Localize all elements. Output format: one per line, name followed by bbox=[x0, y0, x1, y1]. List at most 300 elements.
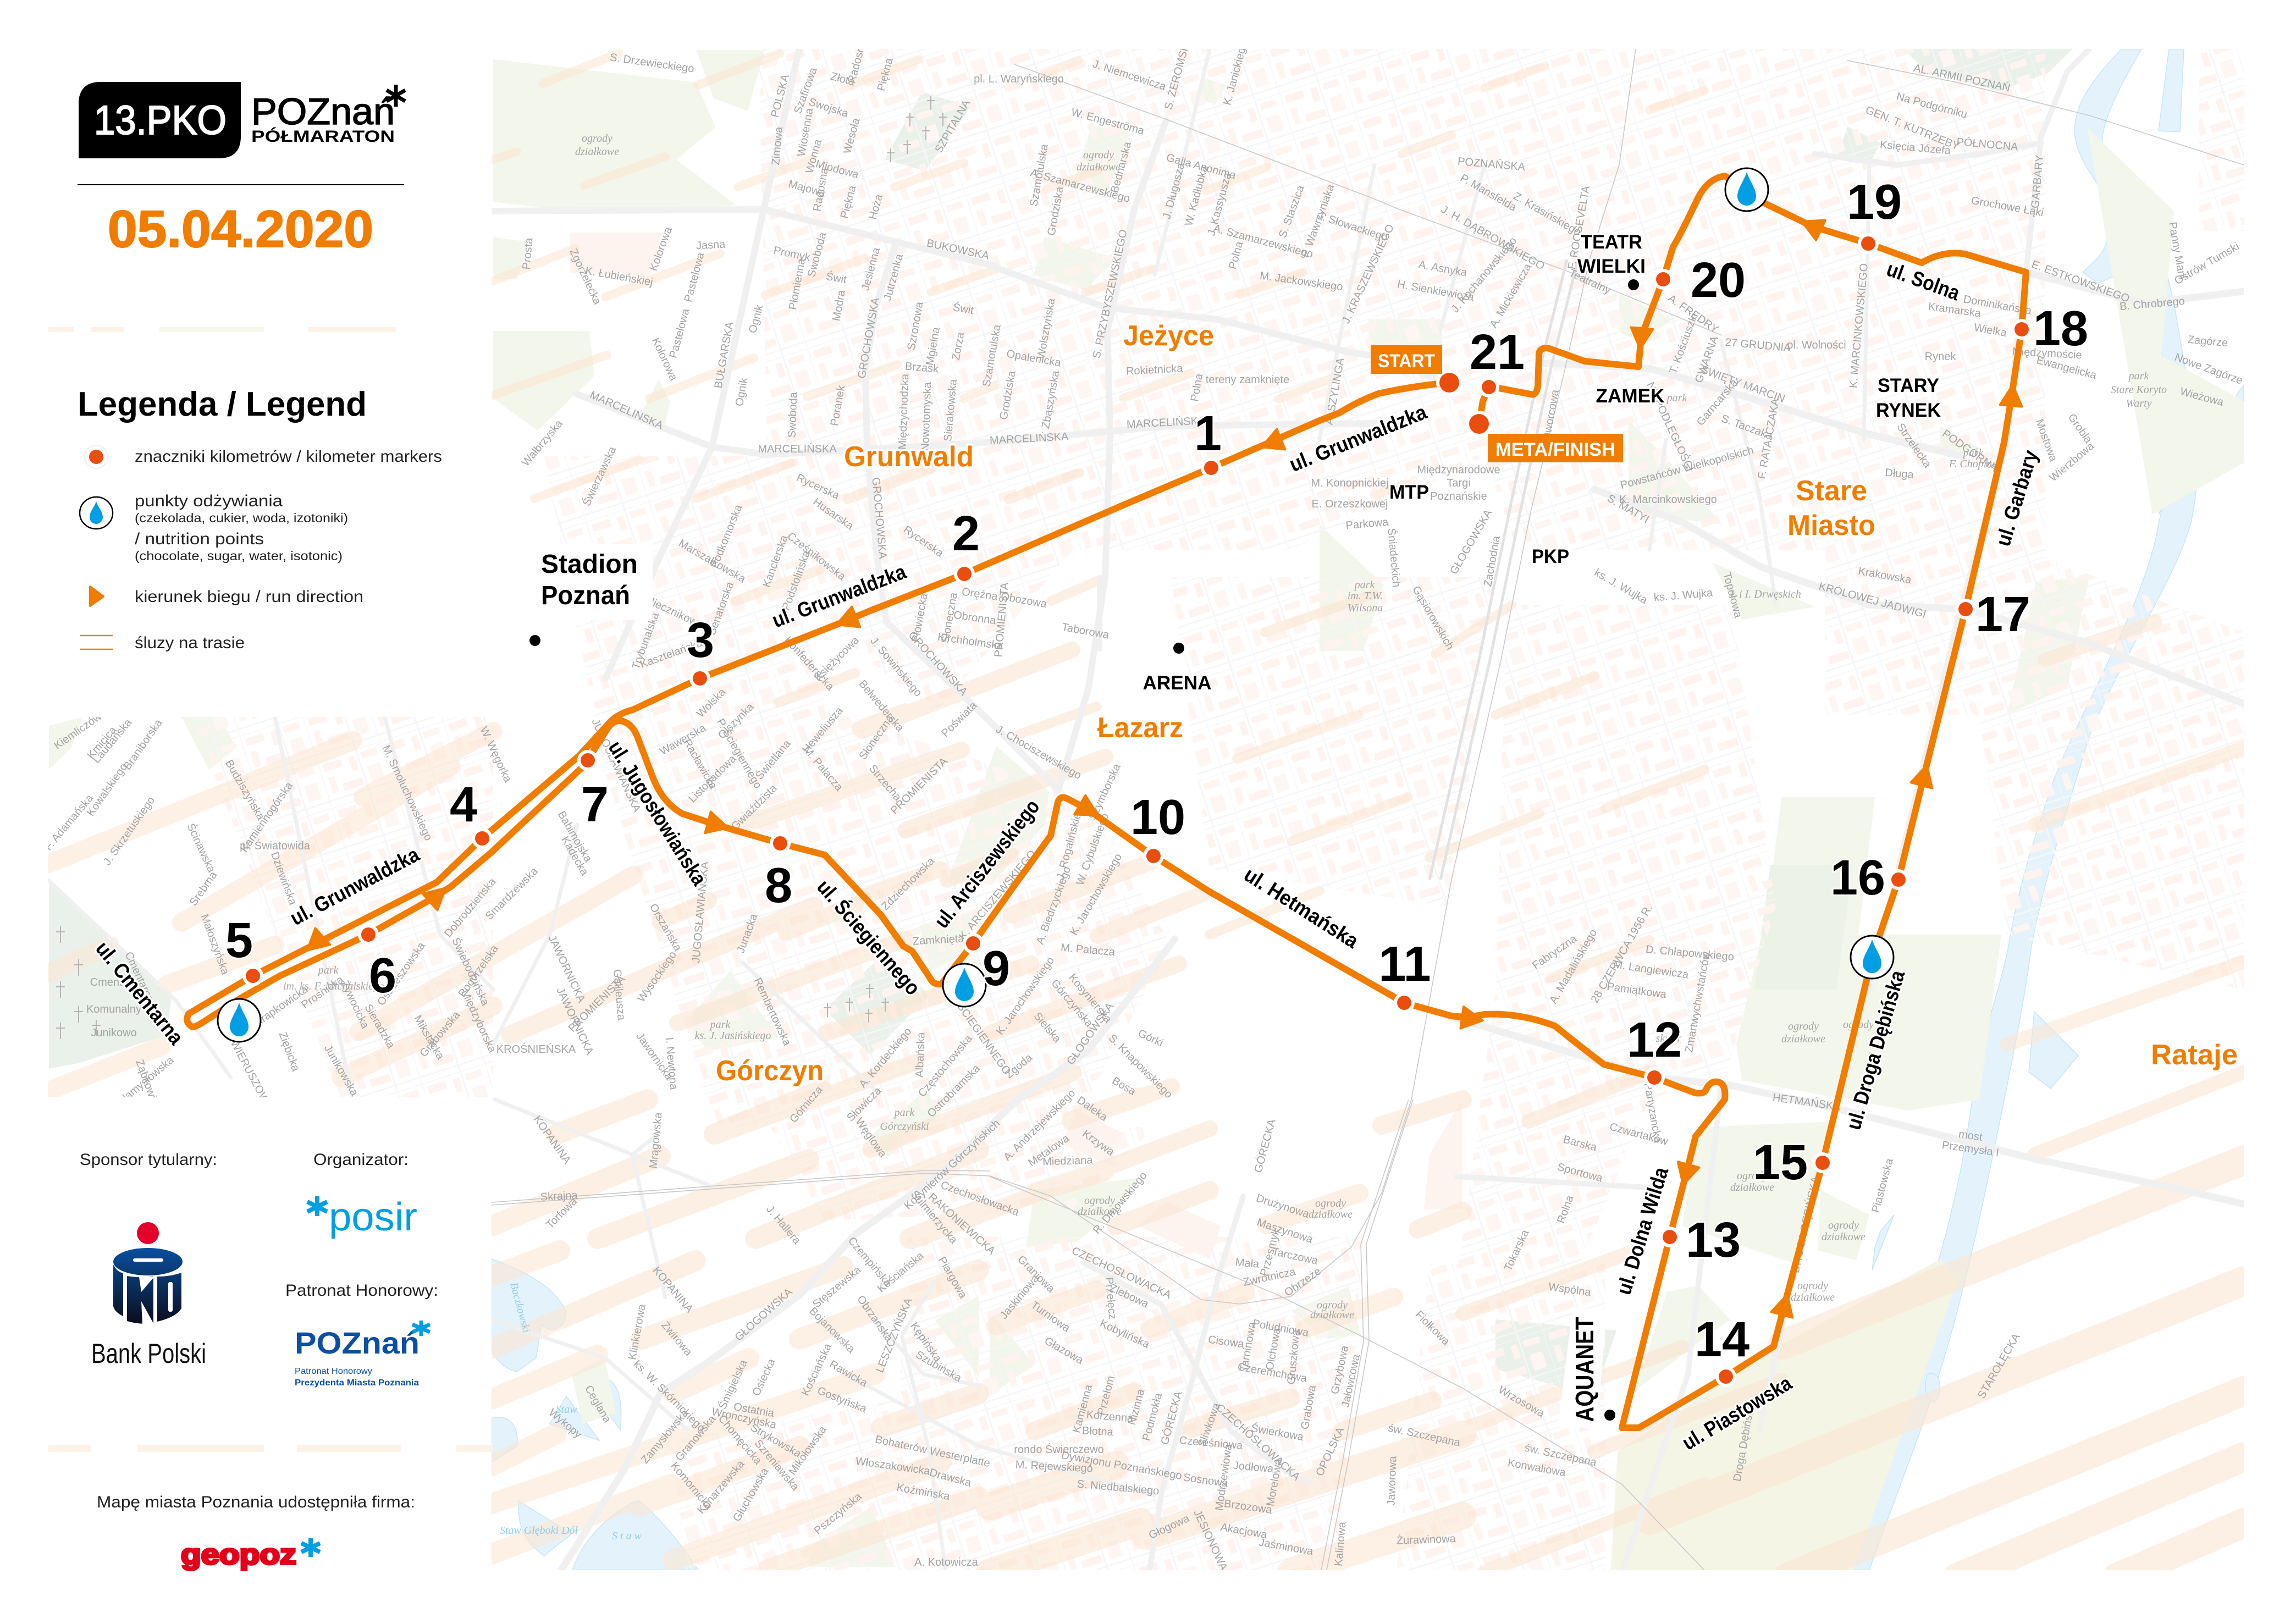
cemetery crosses bbox=[56, 96, 947, 1039]
street names: Babimojska bbox=[555, 809, 594, 865]
street names: Rawicka bbox=[827, 1358, 870, 1390]
street names: RAKONIEWICKA bbox=[926, 1191, 998, 1257]
street names: Przełom bbox=[1095, 1374, 1117, 1417]
street names: Miecznikowa bbox=[643, 593, 705, 631]
white backdrops for place labels bbox=[527, 544, 1607, 1429]
street names: Braniborska bbox=[121, 717, 165, 772]
street names: Przełęcz bbox=[1103, 1277, 1118, 1320]
street names: Jaśminowa bbox=[1258, 1537, 1315, 1558]
street names: Koźmińska bbox=[896, 1482, 951, 1503]
street names: Szreniawska bbox=[752, 1438, 802, 1493]
park names: działkowe bbox=[575, 146, 619, 158]
street names: Dworcowa bbox=[1541, 388, 1561, 441]
street names: Świebodzińska bbox=[449, 936, 493, 1008]
street names: ks. J. Wujka bbox=[1592, 566, 1650, 607]
street names: Tokarska bbox=[1502, 1228, 1532, 1273]
logo: PKO Bank Polski: Bank Polski bbox=[91, 1338, 206, 1369]
race date: 05.04.2020 bbox=[108, 200, 373, 258]
street names: Cmentarna bbox=[123, 950, 157, 1005]
street names: Kanclerska bbox=[760, 533, 791, 589]
logo: POZnań Półmaraton wordmark: POZnań bbox=[251, 91, 395, 132]
icon: water drop at km 9 bbox=[943, 964, 986, 1007]
park names: ks. J. Jasińskiego bbox=[695, 1030, 771, 1042]
street names: J. Sowińskiego bbox=[868, 635, 924, 699]
street names: Słoneczna bbox=[857, 712, 896, 762]
street names: Grochowe Łąki bbox=[1970, 195, 2045, 219]
map credit: Mapę miasta Poznania udostępniła firma: bbox=[97, 1493, 415, 1511]
label: title sponsor: Sponsor tytularny: bbox=[80, 1151, 217, 1169]
street names: Cisowa bbox=[1207, 1334, 1245, 1351]
street names: J. KRASZEWSKIEGO bbox=[1340, 223, 1397, 325]
street names: Mikołowska bbox=[786, 1423, 829, 1477]
kilometer numbers: 17 bbox=[1975, 587, 2030, 642]
street names: P. Mansfelda bbox=[1458, 172, 1519, 214]
street names: Zgorzelecka bbox=[567, 247, 604, 307]
street names: Listopadowa bbox=[686, 753, 739, 805]
street names: A. Asnyka bbox=[1417, 259, 1469, 279]
kilometer numbers: 20 bbox=[1691, 253, 1746, 308]
route street labels: ul. Jugosłowiańska bbox=[604, 737, 711, 890]
start and finish markers bbox=[1436, 369, 1492, 437]
park names: ogrody bbox=[1317, 1299, 1348, 1311]
park names: Baczkowski bbox=[507, 1281, 532, 1334]
street names: Obronna bbox=[953, 609, 997, 627]
street names: S. Knapowskiego bbox=[1106, 1032, 1175, 1101]
street names: pl. Wolności bbox=[1787, 339, 1846, 351]
street names: Albańska bbox=[914, 1031, 927, 1078]
route street labels: ul. Hetmańska bbox=[1240, 863, 1363, 953]
street names: Małoszyńska bbox=[198, 913, 231, 977]
run direction arrows bbox=[300, 212, 2024, 1318]
street names: Poranek bbox=[829, 384, 848, 427]
logo: Poznań honorary patronage bbox=[295, 1321, 430, 1388]
street names: Prośnicka bbox=[299, 973, 346, 1011]
street names: Zachodnia bbox=[1482, 534, 1503, 588]
street names: Nizinna bbox=[1126, 1388, 1147, 1427]
street names: A. Mickiewicza bbox=[1487, 261, 1535, 330]
street names: Grabowska bbox=[417, 1009, 463, 1059]
street names: św. Szczepana bbox=[1387, 1422, 1462, 1449]
place labels and landmark dots: ARENA bbox=[1143, 672, 1212, 694]
street names: Ostrów Tumski bbox=[2172, 240, 2242, 287]
kilometer numbers: 18 bbox=[2033, 301, 2088, 356]
route street labels: ul. Arciszewskiego bbox=[930, 796, 1045, 932]
street names: ks. W. Skórnickiego bbox=[631, 1358, 708, 1434]
place labels and landmark dots: ZAMEK bbox=[1596, 385, 1665, 407]
street names: Świerkowa bbox=[1250, 1421, 1305, 1443]
street names: Kadecka bbox=[559, 835, 591, 878]
street names: W. Engeströma bbox=[1070, 106, 1146, 137]
street names: M. Jackowskiego bbox=[1259, 270, 1344, 294]
large pink building footprints bbox=[570, 233, 1462, 1259]
street names: POLSKA bbox=[769, 73, 792, 119]
park names: Staw bbox=[556, 1404, 577, 1416]
nutrition points bbox=[218, 168, 1894, 1042]
route street labels: ul. Dolna Wilda bbox=[1613, 1164, 1673, 1297]
street names: S. PRZYBYSZEWSKIEGO bbox=[1091, 229, 1130, 360]
street names: GROCHOWSKA bbox=[856, 296, 882, 379]
park names bbox=[283, 132, 2167, 1542]
street names: Radosna bbox=[811, 167, 831, 212]
logo: POSiR: posir bbox=[329, 1195, 417, 1239]
street names: Fabryczna bbox=[1530, 932, 1580, 972]
street names: GÓRECKA bbox=[1252, 1117, 1278, 1174]
street names: CZECHOSŁOWACKA bbox=[1213, 1401, 1302, 1483]
street names: Czeremchowa bbox=[1237, 1361, 1309, 1385]
icon: water drop at km 5 bbox=[218, 999, 261, 1042]
street names: Powstańców Wielkopolskich bbox=[1619, 444, 1755, 491]
district names: Stare bbox=[1796, 475, 1867, 507]
label: organizer: Organizator: bbox=[313, 1151, 409, 1169]
place labels and landmark dots bbox=[529, 231, 1941, 1422]
street names: Dziewińska bbox=[268, 850, 299, 907]
street names: Bosa bbox=[1110, 1075, 1138, 1098]
street names: Podkomorska bbox=[708, 502, 745, 570]
street names: Głuchowska bbox=[731, 1466, 771, 1524]
street names: J. Niemcewicza bbox=[1091, 58, 1168, 93]
street names: Piękna bbox=[838, 184, 859, 220]
street names: M. Palacza bbox=[1060, 942, 1116, 958]
street names: Kosynierów Górczyńskich bbox=[902, 1117, 1002, 1212]
panel: legend bbox=[78, 385, 442, 652]
street names: Głogowa bbox=[1147, 1512, 1192, 1542]
kilometer numbers: 12 bbox=[1627, 1013, 1682, 1068]
street names: Torfowa bbox=[544, 1195, 580, 1231]
street names: Modrzewiowa bbox=[1213, 1443, 1235, 1511]
street names: Mikstacka bbox=[411, 1013, 446, 1062]
street names: JUGOSŁAWIAŃSKA bbox=[589, 717, 644, 814]
legend item: run direction: kierunek biegu / run direction bbox=[135, 588, 363, 606]
street names: Marszałkowska bbox=[676, 537, 748, 585]
street names: S. Taczaka bbox=[1719, 412, 1774, 443]
legend item: nutrition points bbox=[80, 492, 348, 563]
street names: Kobylińska bbox=[1098, 1317, 1152, 1351]
street names: PROMIENISTA bbox=[566, 973, 628, 1035]
street names: A. Kordeckiego bbox=[857, 1025, 914, 1090]
street names: J. Słowackiego bbox=[1316, 209, 1389, 244]
kilometer numbers: 14 bbox=[1695, 1312, 1749, 1367]
street names: Kościańska bbox=[875, 1250, 926, 1295]
street names: A. FREDRY bbox=[1666, 292, 1720, 336]
kilometer numbers: 1 bbox=[1194, 406, 1222, 461]
street names: Pogorzelska bbox=[456, 942, 501, 999]
district names: Jeżyce bbox=[1123, 320, 1214, 352]
street names: Wonna bbox=[803, 137, 824, 175]
street names: Sierakowska bbox=[942, 378, 959, 442]
street names: Trybunalska bbox=[630, 611, 661, 671]
street names: ŚWIĘTY MARCIN bbox=[1699, 363, 1787, 405]
street names: Racławicka bbox=[681, 737, 719, 792]
street names: Zagórze bbox=[2187, 334, 2228, 349]
street names: Bojanowska bbox=[807, 1305, 858, 1356]
street names: Komunalny bbox=[86, 1003, 141, 1015]
street names: Płomienna bbox=[787, 257, 808, 311]
street names: Panny Marii bbox=[2166, 221, 2188, 280]
street names: Rycerska bbox=[794, 472, 842, 502]
route street labels: ul. Piastowska bbox=[1679, 1372, 1796, 1455]
street names: J. Kochanowskiego bbox=[1449, 235, 1519, 315]
park names: ogrody bbox=[1843, 1019, 1874, 1031]
street names: Węglowa bbox=[853, 1116, 889, 1160]
street names: Swojska bbox=[807, 96, 850, 120]
cemeteries bbox=[49, 49, 2072, 1396]
street names: Partyzancka bbox=[1642, 1082, 1664, 1144]
park names: park bbox=[317, 964, 339, 976]
street names: Dobrodzieńska bbox=[442, 875, 499, 940]
street names: F. ROOSEVELTA bbox=[1566, 185, 1592, 270]
street names: Parkowa bbox=[1345, 516, 1389, 532]
street names: Gąsiorowskich bbox=[1410, 584, 1456, 652]
street names: Nowotomyska bbox=[919, 382, 934, 451]
legend item: nutrition points: (chocolate, sugar, water, isotonic) bbox=[135, 549, 343, 563]
park names: park bbox=[893, 1107, 915, 1119]
street names: Mostowa bbox=[2033, 418, 2060, 463]
street names: J. Skrzetuskiego bbox=[101, 794, 157, 868]
street names: Prosta bbox=[521, 237, 536, 270]
route street labels: ul. Ściegiennego bbox=[812, 875, 925, 1000]
street names: Cmentarz bbox=[90, 976, 137, 988]
kilometer numbers: 5 bbox=[225, 913, 253, 968]
park names: Stare Koryto bbox=[2111, 384, 2167, 396]
street names: P. Ściegiennego bbox=[714, 716, 765, 791]
district names: Miasto bbox=[1787, 510, 1875, 542]
street names: Górki bbox=[1136, 1027, 1165, 1049]
label: START: START bbox=[1378, 351, 1435, 372]
street names: M. Konopnickiej bbox=[1311, 477, 1389, 489]
street names: M. Smoluchowskiego bbox=[380, 743, 434, 843]
street names: Złota bbox=[829, 70, 857, 89]
place labels and landmark dots: TEATR bbox=[1581, 231, 1642, 253]
street names: JUGOSŁAWIAŃSKA bbox=[689, 861, 711, 964]
street names: Czempińska bbox=[846, 1235, 894, 1289]
park names: skwer bbox=[1656, 1032, 1682, 1045]
street names: H. Sienkiewicza bbox=[1397, 278, 1475, 303]
street names: J. H. DĄBROWSKIEGO bbox=[1439, 203, 1547, 273]
street names: Nowe Zagórze bbox=[2173, 351, 2244, 387]
street names: Cześnikowska bbox=[785, 530, 848, 583]
street names: STAROŁĘCKA bbox=[1975, 1331, 2023, 1401]
street names: Przesmyk bbox=[1258, 1227, 1282, 1278]
street names: Świt bbox=[952, 300, 975, 317]
street names: Brzask bbox=[904, 360, 940, 375]
kilometer numbers: 8 bbox=[765, 858, 792, 913]
street names: Strykowska bbox=[748, 1422, 804, 1460]
street names: S. Drzewieckiego bbox=[609, 51, 695, 75]
street names: E. ESTKOWSKIEGO bbox=[2030, 258, 2131, 305]
street names: Długa bbox=[1885, 467, 1914, 481]
street names: K. MARCINKOWSKIEGO bbox=[1847, 263, 1870, 389]
route line bbox=[187, 176, 2026, 1428]
park names: ogrody bbox=[1788, 1020, 1819, 1032]
street names: Smardzewska bbox=[483, 865, 541, 923]
street names: Pszczyńska bbox=[812, 1490, 864, 1537]
street names: Kolorowa bbox=[649, 336, 680, 383]
street names: Wesoła bbox=[841, 117, 863, 155]
street names: Bednarska bbox=[1108, 140, 1134, 194]
street names: Podmokła bbox=[1140, 1391, 1165, 1442]
legend heading: Legenda / Legend bbox=[78, 385, 367, 423]
street names: Gruszkowa bbox=[1285, 1329, 1302, 1385]
park names: F. Chopina bbox=[1949, 458, 1997, 470]
street names: Husarska bbox=[811, 496, 856, 533]
street names: Jałowcowa bbox=[1339, 1353, 1362, 1408]
street names: Junacka bbox=[735, 912, 760, 955]
street names: D. Chłapowskiego bbox=[1645, 943, 1735, 963]
legend item: nutrition points: (czekolada, cukier, woda, izotoniki) bbox=[135, 511, 348, 525]
street names: Radosna bbox=[846, 38, 869, 85]
street names: Pamiątkowa bbox=[1606, 981, 1668, 1001]
street names: Ścinawska bbox=[184, 821, 219, 875]
kilometer numbers: 15 bbox=[1753, 1135, 1808, 1190]
street names: Grodziska bbox=[997, 369, 1018, 421]
kilometer numbers: 4 bbox=[450, 777, 477, 832]
street names: Z. Krasińskiego bbox=[1511, 190, 1583, 239]
park names: działkowe bbox=[1310, 1309, 1354, 1321]
street names: F. RATAJCZAKA bbox=[1756, 397, 1782, 480]
street names: MARCELIŃSKA bbox=[758, 443, 837, 455]
street names: Laudańska bbox=[91, 716, 135, 766]
street names: K. Jarochowskiego bbox=[1068, 852, 1124, 937]
street names: Świerzawska bbox=[579, 444, 619, 508]
street names: Chomęcicka bbox=[716, 1413, 764, 1467]
street names: Obozowa bbox=[1000, 590, 1048, 610]
street names: Galileusza bbox=[611, 969, 627, 1021]
street names: Srebrna bbox=[187, 869, 220, 908]
panel: sponsors bbox=[80, 1151, 438, 1571]
street names: S. MATYI bbox=[1605, 492, 1651, 526]
street names: 28 CZERWCA 1956 R. bbox=[1589, 903, 1655, 1005]
street names: Jutrzenka bbox=[881, 252, 906, 302]
street names: Olszynka bbox=[716, 700, 757, 742]
street names: PROMIENISTA bbox=[992, 582, 1011, 658]
street names: Fiołkowa bbox=[1413, 1308, 1453, 1348]
place labels and landmark dots: RYNEK bbox=[1876, 400, 1941, 421]
street names: Szymborska bbox=[1086, 761, 1123, 822]
street names: MARCELIŃSKA bbox=[588, 388, 665, 432]
street names: Jaworowa bbox=[1385, 1456, 1399, 1506]
street names: A. Biedrzyckiego bbox=[1034, 865, 1073, 946]
street names: Konarzewska bbox=[695, 1457, 747, 1516]
street names: Sosnowa bbox=[1183, 1471, 1229, 1490]
street names: Krakowska bbox=[1857, 565, 1913, 587]
street names: Zamknięta bbox=[912, 933, 965, 947]
street names: GWARNA bbox=[1693, 334, 1721, 385]
street names: Płowiecka bbox=[909, 592, 930, 643]
street names: Ognik bbox=[733, 376, 750, 407]
street names: Ognik bbox=[747, 303, 766, 335]
street names: Dywizjonu Poznańskiego bbox=[1061, 1449, 1183, 1482]
street names: Sportowa bbox=[1556, 1161, 1604, 1185]
street names: Komornicka bbox=[668, 1460, 715, 1512]
street names: PROMIENISTA bbox=[888, 755, 950, 817]
kilometer numbers: 13 bbox=[1686, 1213, 1741, 1268]
street names: F. Adamańska bbox=[42, 792, 96, 853]
street names: Międzymoście bbox=[2012, 346, 2082, 361]
street names: Heweliusza bbox=[800, 704, 846, 755]
water: Warta river, lakes and ponds bbox=[492, 49, 2244, 1570]
street names: Jawornicka bbox=[633, 1030, 675, 1083]
park names: park bbox=[1666, 392, 1687, 404]
street names: M. Rejewskiego bbox=[1015, 1459, 1093, 1475]
street names: Oręźna bbox=[961, 586, 999, 603]
street names: Modra bbox=[830, 289, 848, 322]
street names: Polna bbox=[1227, 240, 1246, 270]
street names: Częstochowska bbox=[916, 1032, 975, 1100]
street names: GARBARY bbox=[2029, 154, 2046, 209]
street names: Wspólna bbox=[1548, 1281, 1592, 1299]
street names: JESIONOWA bbox=[1191, 1508, 1230, 1573]
street names: MARCELIŃSKA bbox=[989, 430, 1069, 447]
street names: Maszynowa bbox=[1255, 1217, 1315, 1246]
street names: Wałbrzyska bbox=[520, 417, 565, 469]
street names: K. Marcinkowskiego bbox=[1619, 494, 1717, 506]
street names: Szamotulska bbox=[1028, 143, 1051, 207]
street names: Zamysłowska bbox=[639, 1407, 691, 1466]
street names: Sielska bbox=[1031, 1010, 1063, 1046]
kilometer numbers: 7 bbox=[581, 777, 609, 832]
logo: PKO Bank Polski bbox=[91, 1222, 206, 1369]
street names: Junikowska bbox=[322, 1043, 361, 1098]
street names: W. Kadłubka bbox=[1183, 164, 1211, 228]
street names: Bohaterów Westerplatte bbox=[874, 1433, 991, 1470]
park names: park bbox=[2128, 370, 2149, 382]
street names: Wrzosowa bbox=[1496, 1384, 1547, 1420]
street names: J. Kassyusza bbox=[1205, 171, 1234, 237]
street names: Szamotulska bbox=[980, 323, 1003, 388]
logo: geopoz: geopoz bbox=[181, 1539, 296, 1571]
street names: Grzybowa bbox=[1329, 1344, 1351, 1395]
street names: K. Janickiego bbox=[1221, 40, 1250, 107]
street names: tereny zamknięte bbox=[1206, 374, 1289, 386]
street names: św. Szczepana bbox=[1524, 1442, 1598, 1469]
street names: Orszańska bbox=[647, 902, 684, 954]
street names: rondo Świerczewo bbox=[1014, 1443, 1104, 1456]
legend item: kilometer marker: znaczniki kilometrów / kilometer markers bbox=[135, 448, 442, 466]
park names: ogrody bbox=[1797, 1280, 1828, 1292]
street names: most bbox=[1958, 1128, 1983, 1144]
park names: park bbox=[709, 1019, 731, 1031]
street names: S. Staszica bbox=[1277, 183, 1307, 240]
street names: Rolna bbox=[1555, 1194, 1576, 1225]
street names: J. Chociszewskiego bbox=[994, 723, 1084, 782]
street names: Górnicza bbox=[787, 1084, 825, 1125]
street names: Klinkierowa bbox=[626, 1303, 648, 1361]
street names: Kościańska bbox=[799, 1341, 835, 1397]
street names: Kamienna bbox=[1070, 1383, 1095, 1434]
park names: S t a w bbox=[612, 1530, 642, 1542]
street names: S. ŻEROMSKIEGO bbox=[1162, 16, 1199, 111]
place labels and landmark dots: WIELKI bbox=[1577, 256, 1646, 277]
street names: Czereśniowa bbox=[1179, 1434, 1244, 1452]
street names: Podstolińska bbox=[780, 549, 813, 612]
street names: Słowicza bbox=[845, 1084, 884, 1124]
street names: Mała bbox=[1235, 1256, 1260, 1271]
route street labels: ul. Grunwaldzka bbox=[286, 843, 423, 930]
street names: Grodziska bbox=[1045, 185, 1066, 236]
street names: Przemysła I bbox=[1941, 1139, 2000, 1159]
street names: AL. ARMII POZNAŃ bbox=[1912, 62, 2011, 94]
district names: Górczyn bbox=[716, 1055, 824, 1087]
icon: water drop at km 19 bbox=[1725, 168, 1768, 211]
street names: Polna bbox=[1189, 372, 1206, 402]
park names: im. ks. F. Michalskiego bbox=[283, 980, 384, 992]
street names: Swoboda bbox=[786, 391, 799, 438]
street names: Zorza bbox=[950, 331, 967, 361]
street names: Kramarska bbox=[1927, 300, 1982, 320]
street names: Wielka bbox=[1973, 322, 2008, 339]
panel: title logo bbox=[79, 82, 405, 158]
street names: Graniowa bbox=[1015, 1253, 1057, 1295]
